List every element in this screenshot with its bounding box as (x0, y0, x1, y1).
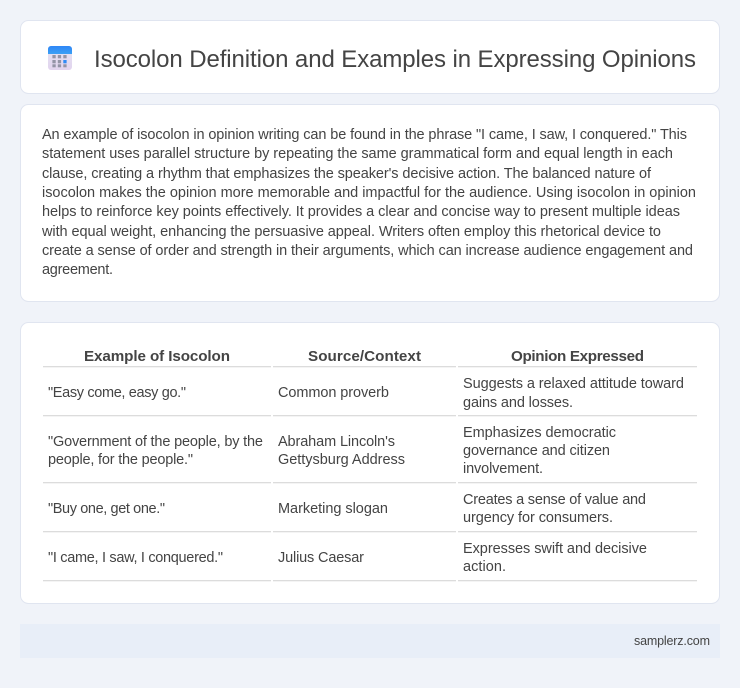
title: Isocolon Definition and Examples in Expressing Opinions (94, 46, 696, 73)
table row: Government of the people: "Government of the people, by the (48, 434, 263, 450)
header card (20, 20, 720, 94)
table header: Source/Context (308, 348, 421, 365)
footer (20, 624, 720, 658)
text block: description paragraph: isocolon makes the opinion more memorable and impactful for the audience. Using isocolon in opinion (42, 185, 696, 201)
panel: description (20, 104, 720, 302)
table row: Government of the people (48, 425, 616, 477)
table row: Government of the people: Gettysburg Address (278, 452, 405, 468)
table row: I came, I saw, I conquered (48, 541, 647, 575)
table row: Easy come, easy go (48, 376, 684, 411)
table row: Government of the people: governance and citizen (463, 443, 610, 459)
footer credit: samplerz.com (634, 634, 710, 648)
table row: Government of the people: people, for the people." (48, 452, 193, 468)
table row: Government of the people: involvement. (463, 461, 543, 477)
text block: description paragraph: with equal weight, enhancing the persuasive appeal. Writers often employ this rhetorical device to (41, 224, 661, 240)
table header: Example of Isocolon (84, 348, 230, 365)
table row: Easy come, easy go: gains and losses. (463, 395, 573, 411)
table row: Buy one, get one: "Buy one, get one." (48, 501, 165, 517)
table row: Buy one, get one: Creates a sense of value and (463, 492, 646, 508)
table row: I came, I saw, I conquered: action. (463, 559, 506, 575)
table row: Easy come, easy go: "Easy come, easy go." (48, 385, 186, 401)
text block: description paragraph: statement uses parallel structure by repeating the same grammatical form and equal length in each (42, 146, 673, 162)
table row: Buy one, get one (48, 492, 646, 526)
icon: calendar (48, 46, 72, 70)
text block: description paragraph: agreement. (42, 262, 113, 278)
text block: description paragraph: helps to reinforce key points effectively. It provides a clear and concise way to present multiple ideas (42, 204, 680, 220)
table header: Opinion Expressed (511, 348, 644, 365)
table row: Easy come, easy go: Common proverb (278, 385, 389, 401)
table row: Easy come, easy go: Suggests a relaxed attitude toward (463, 376, 684, 392)
table header (84, 348, 644, 365)
table row: Buy one, get one: Marketing slogan (278, 501, 388, 517)
table row: Government of the people: Abraham Lincoln's (278, 434, 395, 450)
text block: description paragraph: clause, creating a rhythm that emphasizes the speaker's decisive action. The balanced nature of (42, 166, 652, 182)
table row: I came, I saw, I conquered: Expresses swift and decisive (463, 541, 647, 557)
table row: Government of the people: Emphasizes democratic (463, 425, 616, 441)
table row: I came, I saw, I conquered: "I came, I saw, I conquered." (48, 550, 223, 566)
table row: Buy one, get one: urgency for consumers. (463, 510, 613, 526)
text block: description paragraph: An example of isocolon in opinion writing can be found in the phrase "I came, I saw, I conquered." This (42, 127, 687, 143)
text block: description paragraph: create a sense of order and strength in their arguments, which can increase audience engagement and (42, 243, 693, 259)
text block: description paragraph (41, 127, 696, 278)
panel: examples table (20, 322, 720, 604)
table row: I came, I saw, I conquered: Julius Caesar (278, 550, 364, 566)
